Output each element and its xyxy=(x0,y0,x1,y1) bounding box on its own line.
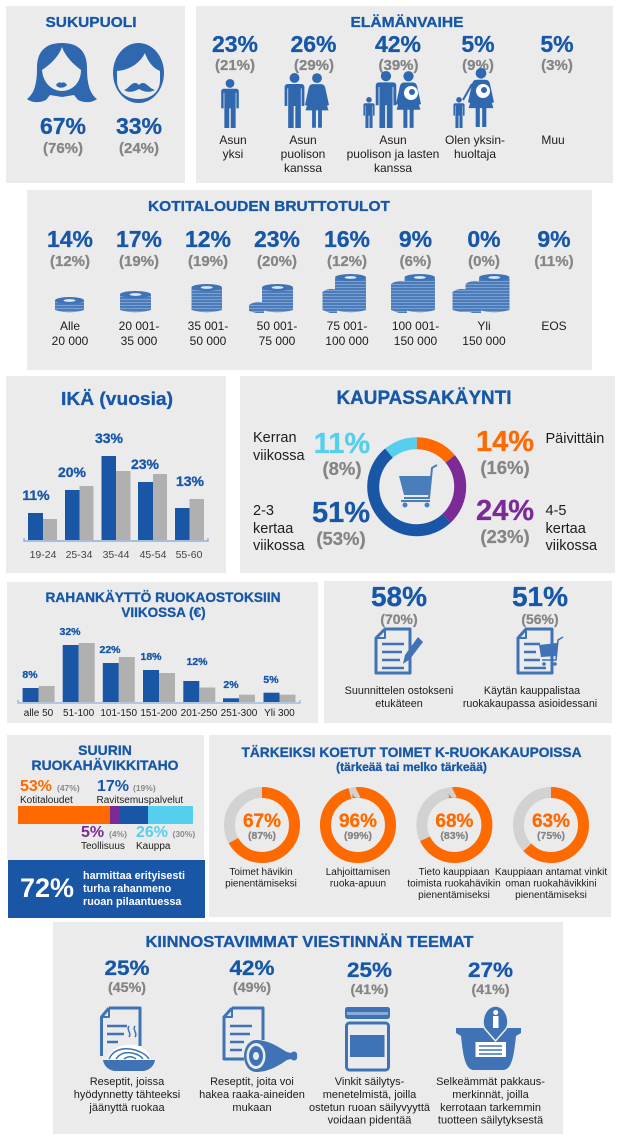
label: päivittäin: (16%) xyxy=(480,457,530,478)
donut: tieto kauppiaan toimista: pienentämiseksi xyxy=(418,890,490,901)
income: yli 150 000: Yli xyxy=(477,319,491,333)
theme: reseptit raaka-aineista: Reseptit, joita voi xyxy=(210,1076,294,1088)
income: 100 001-150 000: 150 000 xyxy=(394,334,438,348)
stat: asun puolison kanssa: kanssa xyxy=(284,161,322,175)
stat: asun puolison ja lasten kanssa: kanssa xyxy=(374,161,412,175)
theme: reseptit tähteistä: 25% xyxy=(104,957,150,980)
income: 100 001-150 000 xyxy=(391,226,439,348)
stat: naiset: 67% xyxy=(40,113,86,139)
donut: toimet hävikin pienentämiseksi: pienentämiseksi xyxy=(225,878,297,890)
donut: lahjoittaminen: ruoka-apuun xyxy=(330,878,386,890)
stat: naiset: (76%) xyxy=(43,140,83,157)
bar chart: rahankäyttö: 32% xyxy=(59,626,81,638)
panel: ikä xyxy=(6,376,226,573)
callout: 72% harmittaa: turha rahanmeno xyxy=(83,883,172,895)
stat: asun puolison kanssa: Asun xyxy=(289,133,317,147)
bar chart: rahankäyttö: 51-100 xyxy=(63,708,95,719)
heading: kiinnostavimmat viestinnän teemat: KIINNOSTAVIMMAT VIESTINNÄN TEEMAT xyxy=(146,934,474,951)
stat: suunnittelen ostokseni: (70%) xyxy=(380,611,418,627)
icon: recipe and ham xyxy=(224,1008,297,1072)
bar chart: ikä: 11% xyxy=(22,487,50,503)
label: kerran viikossa xyxy=(253,428,370,479)
label: kauppa xyxy=(136,824,195,852)
stat: asun yksi: yksi xyxy=(223,147,243,161)
income: EOS: (11%) xyxy=(534,253,574,270)
income: 100 001-150 000: (6%) xyxy=(400,253,431,270)
heading: kaupassakäynti: KAUPASSAKÄYNTI xyxy=(336,388,512,409)
heading: rahankäyttö: VIIKOSSA (€) xyxy=(121,605,206,620)
income: 75 001-100 000: 75 001- xyxy=(327,319,367,333)
income: 35 001-50 000: 12% xyxy=(185,226,231,252)
stat: miehet: 33% xyxy=(116,113,162,139)
label: kauppa: Kauppa xyxy=(136,841,171,852)
stat: asun puolison kanssa: (29%) xyxy=(294,57,334,74)
income: EOS xyxy=(534,226,574,333)
income: yli 150 000: (0%) xyxy=(468,253,500,270)
stat: yksinhuoltaja: 5% xyxy=(461,31,495,57)
stat: yksinhuoltaja: huoltaja xyxy=(454,147,496,161)
income: EOS: 9% xyxy=(537,226,571,252)
stat: asun yksi: (21%) xyxy=(215,57,255,74)
income: 75 001-100 000 xyxy=(322,226,370,348)
stat: asun puolison kanssa: 26% xyxy=(290,31,337,57)
income: EOS: EOS xyxy=(541,319,567,333)
income: alle 20 000 xyxy=(47,226,93,348)
heading: rahankäyttö: RAHANKÄYTTÖ RUOKAOSTOKSIIN xyxy=(46,590,280,605)
theme: säilytysmenetelmät: Vinkit säilytys- xyxy=(335,1076,405,1088)
label: 4-5 kertaa viikossa: (23%) xyxy=(480,526,530,547)
donut: kauppiaan antamat vinkit: oman ruokahävikkini xyxy=(505,878,597,890)
donut: kauppiaan antamat vinkit: Kauppiaan antamat vinkit xyxy=(495,867,607,878)
label: kotitaloudet: 53% xyxy=(20,778,52,795)
stat: asun puolison kanssa xyxy=(281,31,337,175)
bar chart: rahankäyttö: 251-300 xyxy=(221,708,258,719)
heading: bruttotulot: KOTITALOUDEN BRUTTOTULOT xyxy=(148,198,390,215)
theme: reseptit raaka-aineista: 42% xyxy=(230,957,275,980)
stacked bar xyxy=(18,806,193,824)
label: kerran viikossa: Kerran xyxy=(253,430,297,446)
icon: package and info pin xyxy=(456,1006,521,1070)
income: 50 001-75 000: 50 001- xyxy=(257,319,297,333)
bar chart: rahankäyttö: 18% xyxy=(140,651,162,663)
stat: muu: (3%) xyxy=(541,57,573,74)
bar chart: ikä: 19-24 xyxy=(30,549,57,561)
bar chart: rahankäyttö: alle 50 xyxy=(24,708,54,719)
theme: reseptit tähteistä: jäänyttä ruokaa xyxy=(88,1102,165,1114)
donut: tieto kauppiaan toimista: toimista ruokahävikin xyxy=(407,878,501,890)
bar chart: ikä: 13% xyxy=(176,473,205,489)
donut: tieto kauppiaan toimista xyxy=(407,792,501,901)
income: 50 001-75 000: 23% xyxy=(254,226,300,252)
income: yli 150 000: 150 000 xyxy=(462,334,506,348)
bar chart: ikä: 45-54 xyxy=(140,549,167,561)
theme: säilytysmenetelmät: ostetun ruoan säilyvyyttä xyxy=(309,1102,431,1114)
income: 75 001-100 000: 16% xyxy=(324,226,370,252)
donut: toimet hävikin pienentämiseksi: (87%) xyxy=(248,830,276,842)
label: 2-3 kertaa viikossa: (53%) xyxy=(316,528,366,549)
bar chart: rahankäyttö: 151-200 xyxy=(140,708,177,719)
label: kotitaloudet: (47%) xyxy=(57,783,80,793)
bar chart: ikä: 23% xyxy=(131,456,160,472)
income: 50 001-75 000: (20%) xyxy=(257,253,297,270)
stat: asun yksi: Asun xyxy=(219,133,247,147)
bar chart: ikä xyxy=(22,430,208,561)
donut: lahjoittaminen: Lahjoittamisen xyxy=(326,867,390,878)
stat: yksinhuoltaja: Olen yksin- xyxy=(445,133,505,147)
label: 2-3 kertaa viikossa xyxy=(253,497,370,554)
label: 2-3 kertaa viikossa: 2-3 xyxy=(253,503,274,519)
stat: muu: Muu xyxy=(541,133,565,147)
donut: kauppiaan antamat vinkit: pienentämiseksi xyxy=(515,890,587,901)
icon: jar xyxy=(345,1007,390,1070)
label: 4-5 kertaa viikossa: 24% xyxy=(476,495,534,527)
label: ravitsemuspalvelut: (19%) xyxy=(133,783,156,793)
theme: reseptit raaka-aineista xyxy=(199,957,305,1114)
bar chart: ikä: 55-60 xyxy=(176,549,203,561)
bar chart: rahankäyttö: 8% xyxy=(22,669,38,681)
bar chart: rahankäyttö xyxy=(18,626,300,719)
label: ravitsemuspalvelut: 17% xyxy=(97,778,129,795)
income: alle 20 000: 20 000 xyxy=(52,334,89,348)
stat: miehet xyxy=(116,113,162,157)
stat: asun puolison kanssa: puolison xyxy=(281,147,325,161)
income: 35 001-50 000: 35 001- xyxy=(188,319,228,333)
donut: toimet hävikin pienentämiseksi: 67% xyxy=(243,811,281,832)
stat: suunnittelen ostokseni xyxy=(345,581,453,710)
heading: ikä: IKÄ (vuosia) xyxy=(61,389,173,409)
stat: kauppalista: Käytän kauppalistaa xyxy=(484,685,580,697)
income: 20 001-35 000: 20 001- xyxy=(119,319,159,333)
panel: kaupassakäynti xyxy=(240,376,615,573)
stat: muu xyxy=(540,31,574,147)
label: kotitaloudet xyxy=(20,778,80,806)
panel: elämänvaihe xyxy=(196,6,613,183)
label: kauppa: 26% xyxy=(136,824,168,841)
label: 4-5 kertaa viikossa: 4-5 xyxy=(546,503,566,519)
label: 2-3 kertaa viikossa: kertaa xyxy=(253,521,294,537)
income: 75 001-100 000: (12%) xyxy=(327,253,367,270)
theme: pakkausmerkinnät: Selkeämmät pakkaus- xyxy=(436,1076,545,1088)
panel: kotitalouden bruttotulot xyxy=(27,190,592,370)
bar chart: rahankäyttö: 22% xyxy=(99,644,121,656)
callout: 72% harmittaa: 72% xyxy=(20,873,74,903)
income: yli 150 000 xyxy=(452,226,510,348)
bar chart: ikä: 20% xyxy=(58,464,87,480)
income: 50 001-75 000: 75 000 xyxy=(259,334,296,348)
theme: pakkausmerkinnät: (41%) xyxy=(472,982,510,997)
bar chart: rahankäyttö: 5% xyxy=(263,674,279,686)
icon: shopping cart xyxy=(399,465,437,508)
label: kerran viikossa: viikossa xyxy=(253,448,306,464)
stat: asun puolison ja lasten kanssa: puolison ja lasten xyxy=(347,147,439,161)
theme: pakkausmerkinnät: tuotteen säilytyksestä xyxy=(438,1114,544,1126)
label: päivittäin: Päivittäin xyxy=(546,431,604,447)
theme: reseptit raaka-aineista: hakea raaka-aineiden xyxy=(199,1089,305,1101)
label: kerran viikossa: (8%) xyxy=(322,458,362,479)
bar chart: ikä: 35-44 xyxy=(103,549,130,561)
panel: tärkeiksi koetut toimet xyxy=(209,735,611,917)
theme: reseptit raaka-aineista: mukaan xyxy=(232,1102,272,1114)
donut: kauppiaan antamat vinkit: 63% xyxy=(532,811,570,832)
label: 4-5 kertaa viikossa: viikossa xyxy=(546,538,598,554)
stat: asun puolison ja lasten kanssa xyxy=(347,31,439,175)
stat: asun yksi xyxy=(212,31,258,161)
label: 4-5 kertaa viikossa: kertaa xyxy=(546,521,587,537)
callout: 72% harmittaa: ruoan pilaantuessa xyxy=(83,896,182,908)
stat: suunnittelen ostokseni: Suunnittelen ostokseni xyxy=(345,685,453,697)
stat: suunnittelen ostokseni: etukäteen xyxy=(375,698,423,710)
income: 20 001-35 000: 17% xyxy=(116,226,162,252)
donut: lahjoittaminen xyxy=(326,792,390,890)
stat: suunnittelen ostokseni: 58% xyxy=(371,581,427,612)
theme: säilytysmenetelmät: voidaan pidentää xyxy=(328,1114,412,1126)
theme: reseptit tähteistä: Reseptit, joissa xyxy=(90,1076,165,1088)
label: kauppa: (30%) xyxy=(172,829,195,839)
theme: säilytysmenetelmät: (41%) xyxy=(350,982,388,997)
icon: recipe and noodles xyxy=(102,1008,155,1071)
stat: asun yksi: 23% xyxy=(212,31,258,57)
label: kotitaloudet: Kotitaloudet xyxy=(20,795,73,806)
donut: toimet hävikin pienentämiseksi: Toimet hävikin xyxy=(229,867,293,878)
stat: asun puolison ja lasten kanssa: 42% xyxy=(375,31,421,57)
stat: naiset xyxy=(40,113,86,157)
donut: tieto kauppiaan toimista: 68% xyxy=(435,811,474,832)
income: 35 001-50 000: 50 000 xyxy=(190,334,227,348)
stat: kauppalista: ruokakaupassa asioidessani xyxy=(463,698,597,710)
bar chart: rahankäyttö: 201-250 xyxy=(181,708,218,719)
callout: 72% harmittaa: harmittaa erityisesti xyxy=(83,870,185,882)
theme: säilytysmenetelmät: 25% xyxy=(347,959,392,982)
income: 35 001-50 000 xyxy=(185,226,231,348)
bar chart: rahankäyttö: 2% xyxy=(223,679,239,691)
stat: asun puolison ja lasten kanssa: (39%) xyxy=(378,57,419,74)
income: 75 001-100 000: 100 000 xyxy=(325,334,369,348)
bar chart: ikä: 33% xyxy=(95,430,124,446)
income: 20 001-35 000: 35 000 xyxy=(121,334,158,348)
stat: kauppalista: 51% xyxy=(512,581,568,612)
heading: suurin ruokahävikkitaho: RUOKAHÄVIKKITAHO xyxy=(32,757,179,773)
stat: muu: 5% xyxy=(540,31,574,57)
income: 100 001-150 000: 9% xyxy=(399,226,432,252)
theme: pakkausmerkinnät: 27% xyxy=(468,959,513,982)
stat: miehet: (24%) xyxy=(119,140,159,157)
donut: lahjoittaminen: 96% xyxy=(339,811,377,832)
icon: document and cart xyxy=(518,629,563,673)
heading: elämänvaihe: ELÄMÄNVAIHE xyxy=(350,14,464,31)
panel: sukupuoli xyxy=(6,6,185,183)
callout: 72% harmittaa xyxy=(8,860,205,918)
income: 50 001-75 000 xyxy=(249,226,300,348)
donut: lahjoittaminen: (99%) xyxy=(344,830,372,842)
label: päivittäin xyxy=(476,426,604,478)
income: 100 001-150 000: 100 001- xyxy=(392,319,439,333)
theme: reseptit tähteistä: hyödynnetty tähteeksi xyxy=(74,1089,180,1101)
income: alle 20 000: (12%) xyxy=(50,253,90,270)
theme: säilytysmenetelmät xyxy=(309,959,431,1126)
label: kerran viikossa: 11% xyxy=(314,428,370,460)
income: 20 001-35 000 xyxy=(116,226,162,348)
bar chart: rahankäyttö: 12% xyxy=(186,656,208,668)
theme: reseptit tähteistä xyxy=(74,957,180,1114)
stat: yksinhuoltaja: (9%) xyxy=(462,57,494,74)
icon: document and pencil xyxy=(376,629,423,673)
label: 4-5 kertaa viikossa xyxy=(476,495,598,554)
income: 20 001-35 000: (19%) xyxy=(119,253,159,270)
label: teollisuus xyxy=(81,824,127,852)
panel: suunnittelu xyxy=(324,581,612,723)
label: teollisuus: (4%) xyxy=(109,829,127,839)
icon: man face xyxy=(113,43,164,103)
label: ravitsemuspalvelut xyxy=(96,778,183,806)
income: alle 20 000: 14% xyxy=(47,226,93,252)
theme: reseptit raaka-aineista: (49%) xyxy=(233,980,271,995)
panel: suurin ruokahävikkitaho xyxy=(7,735,204,860)
income: 35 001-50 000: (19%) xyxy=(188,253,228,270)
donut: toimet hävikin pienentämiseksi xyxy=(225,792,297,890)
stat: asun puolison ja lasten kanssa: Asun xyxy=(379,133,407,147)
donut: tieto kauppiaan toimista: (83%) xyxy=(440,830,468,842)
label: teollisuus: 5% xyxy=(81,824,104,841)
stat: kauppalista xyxy=(463,581,597,710)
stat: yksinhuoltaja xyxy=(445,31,505,161)
bar chart: rahankäyttö: Yli 300 xyxy=(264,708,295,719)
panel: rahankäyttö xyxy=(7,582,318,723)
icon: woman face xyxy=(27,43,97,102)
heading: suurin ruokahävikkitaho: SUURIN xyxy=(78,742,132,758)
donut: kauppiaan antamat vinkit: (75%) xyxy=(537,830,565,842)
theme: pakkausmerkinnät: merkinnät, joilla xyxy=(452,1089,530,1101)
heading: tärkeiksi koetut toimet: (tärkeää tai melko tärkeää) xyxy=(336,760,487,774)
label: ravitsemuspalvelut: Ravitsemuspalvelut xyxy=(96,795,183,806)
income: alle 20 000: Alle xyxy=(60,319,80,333)
bar chart: ikä: 25-34 xyxy=(66,549,93,561)
donut chart: kaupassakäynti xyxy=(373,443,460,530)
label: 2-3 kertaa viikossa: viikossa xyxy=(253,538,306,554)
label: päivittäin: 14% xyxy=(476,426,534,458)
label: 2-3 kertaa viikossa: 51% xyxy=(312,497,370,529)
theme: pakkausmerkinnät: kerrotaan tarkemmin xyxy=(440,1102,541,1114)
theme: säilytysmenetelmät: menetelmistä, joilla xyxy=(323,1089,417,1101)
donut: kauppiaan antamat vinkit xyxy=(495,792,607,901)
theme: pakkausmerkinnät xyxy=(436,959,545,1126)
label: teollisuus: Teollisuus xyxy=(81,841,125,852)
income: yli 150 000: 0% xyxy=(467,226,501,252)
theme: reseptit tähteistä: (45%) xyxy=(108,980,146,995)
bar chart: rahankäyttö: 101-150 xyxy=(100,708,137,719)
stat: kauppalista: (56%) xyxy=(521,611,559,627)
heading: tärkeiksi koetut toimet: TÄRKEIKSI KOETUT TOIMET K-RUOKAKAUPOISSA xyxy=(242,745,582,760)
donut: tieto kauppiaan toimista: Tieto kauppiaan xyxy=(419,867,489,878)
heading: sukupuoli: SUKUPUOLI xyxy=(46,14,136,31)
panel: kiinnostavimmat viestinnän teemat xyxy=(53,922,563,1134)
